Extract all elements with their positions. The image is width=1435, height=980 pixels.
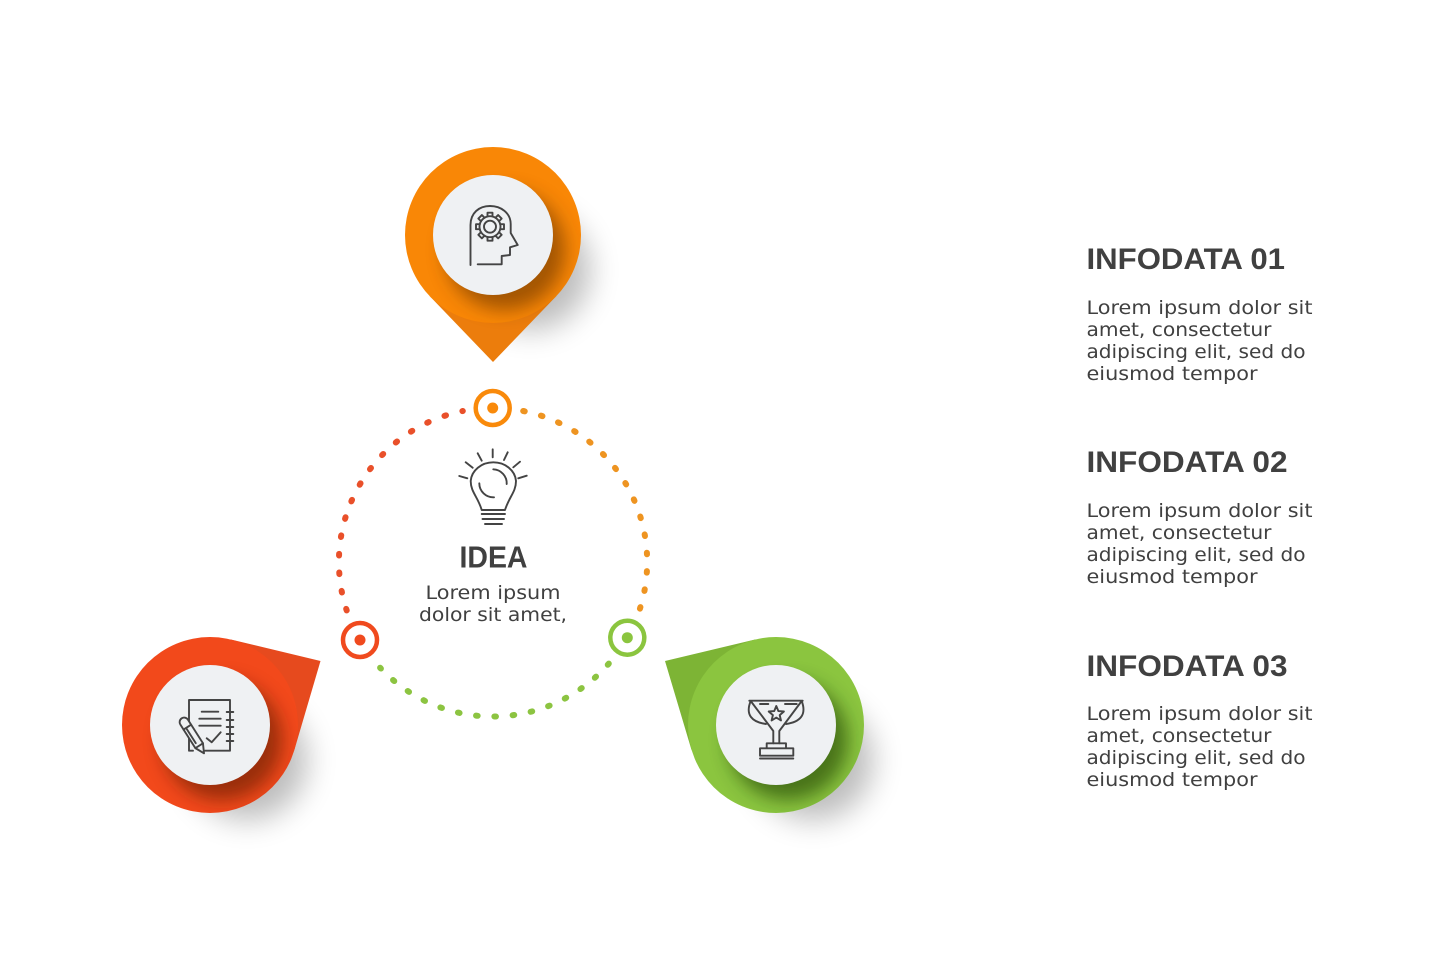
body: infodata 02: Lorem ipsum dolor sit bbox=[1086, 500, 1312, 522]
icon: notes with pen bbox=[178, 700, 233, 756]
centre heading: IDEA: IDEA bbox=[460, 540, 528, 574]
icon: head with gear bbox=[470, 206, 518, 265]
centre text: dolor sit amet, bbox=[419, 604, 567, 626]
body: infodata 01: Lorem ipsum dolor sit bbox=[1086, 297, 1312, 319]
icon: light bulb bbox=[459, 449, 527, 524]
panel: green pin bbox=[665, 637, 873, 820]
heading: infodata 02: INFODATA 02 bbox=[1086, 446, 1288, 479]
body: infodata 02: amet, consectetur bbox=[1086, 522, 1272, 544]
dotted arc: green bbox=[380, 664, 609, 717]
text block: infodata 01 bbox=[1086, 243, 1312, 385]
centre text bbox=[419, 582, 567, 626]
body: infodata 02: eiusmod tempor bbox=[1086, 566, 1258, 588]
body: infodata 02: adipiscing elit, sed do bbox=[1086, 544, 1306, 566]
target marker: orange bbox=[476, 391, 510, 425]
text block: infodata 02 bbox=[1086, 446, 1312, 588]
dotted arc: orange bbox=[523, 411, 647, 609]
target marker: red bbox=[343, 623, 377, 657]
body: infodata 03: adipiscing elit, sed do bbox=[1086, 747, 1306, 769]
body: infodata 03: Lorem ipsum dolor sit bbox=[1086, 703, 1312, 725]
body: infodata 01 bbox=[1086, 297, 1312, 385]
heading: infodata 03: INFODATA 03 bbox=[1086, 650, 1288, 683]
body: infodata 03 bbox=[1086, 703, 1312, 791]
body: infodata 01: adipiscing elit, sed do bbox=[1086, 341, 1306, 363]
panel: orange pin bbox=[405, 147, 590, 362]
icon: trophy bbox=[749, 701, 803, 758]
dotted ring bbox=[339, 411, 647, 717]
heading: infodata 01: INFODATA 01 bbox=[1086, 243, 1285, 276]
centre text: Lorem ipsum bbox=[426, 582, 560, 604]
target marker: green bbox=[610, 621, 644, 655]
body: infodata 03: eiusmod tempor bbox=[1086, 769, 1258, 791]
body: infodata 01: amet, consectetur bbox=[1086, 319, 1272, 341]
body: infodata 02 bbox=[1086, 500, 1312, 588]
body: infodata 03: amet, consectetur bbox=[1086, 725, 1272, 747]
dotted arc: red bbox=[339, 411, 463, 610]
panel: red pin bbox=[122, 637, 320, 820]
body: infodata 01: eiusmod tempor bbox=[1086, 363, 1258, 385]
text block: infodata 03 bbox=[1086, 650, 1312, 791]
